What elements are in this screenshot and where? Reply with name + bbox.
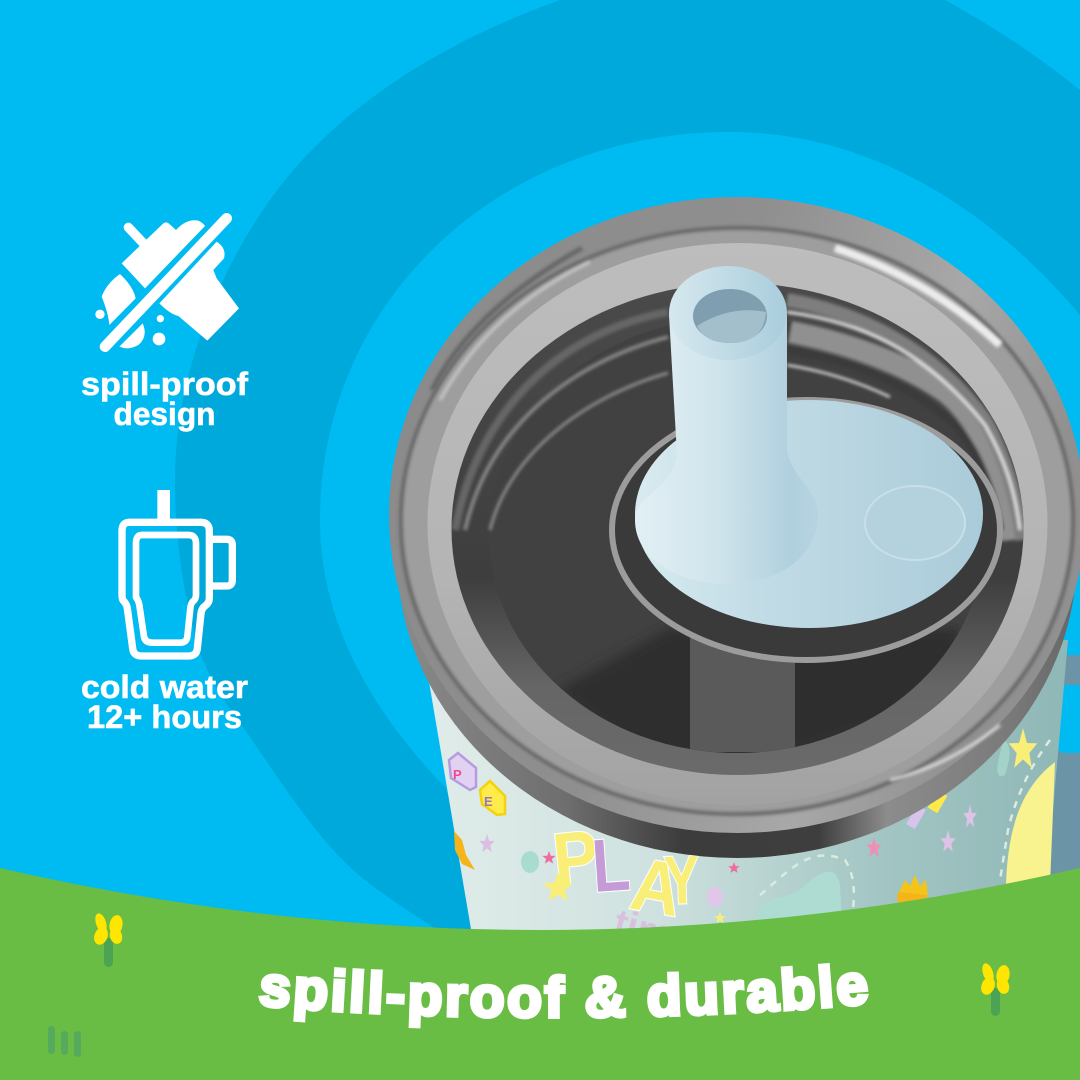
icon: tumbler [122,490,232,656]
print: hearts and orange creatures [454,740,1010,908]
lid: rim groove [401,228,1073,814]
lid: lower dark band [397,252,1077,858]
print: dashed track [760,740,1050,915]
lid: inner clear ring [612,400,1000,660]
feature: spill-proof design [81,218,248,432]
well: tube shadow [557,628,960,760]
print: PLAY lettering: A [625,842,688,933]
label: cold water 12+ hours: cold water [81,669,248,705]
straw hole [693,289,767,343]
lid: inner light band [428,243,1048,805]
cup handle [1035,655,1080,890]
print: letter blocks [449,753,505,815]
print: yellow shape [1006,762,1055,885]
decorative flower left [92,912,124,967]
print: teal blob [758,872,842,925]
print: PLAY lettering [549,815,701,933]
background: inner light swirl [320,132,1080,930]
straw mouth [669,266,787,360]
feature: cold water 12+ hours [81,490,248,735]
print: time lettering: time [610,902,696,962]
background: dark swirl ring [175,0,1080,930]
icon: spill-proof [95,218,239,348]
stopper disc [635,400,983,628]
decorative flower right [979,962,1011,1016]
label: spill-proof design: design [114,396,216,432]
lid: inner opening [452,283,1024,775]
print: stars [479,728,1037,923]
green ground [0,868,1080,1080]
print: letter blocks: P [453,767,462,782]
decorative grass tuft [48,1026,81,1057]
lid: outer rim [389,197,1080,833]
print: PLAY lettering: L [589,823,632,908]
label: spill-proof design: spill-proof [81,366,248,402]
print: PLAY lettering: Y [663,841,701,919]
label: cold water 12+ hours: 12+ hours [87,699,242,735]
lid: rim highlights [432,248,1000,780]
cup lid [389,197,1080,858]
print: letter blocks: E [484,794,493,809]
footer headline: spill-proof & durable [258,963,869,1028]
cup body with print [427,640,1068,962]
well: upper arcs [455,300,1022,540]
stopper vent oval [865,486,965,560]
lid: interior well [455,300,1022,760]
straw tube and base [635,315,818,584]
straw [635,266,818,584]
print: PLAY lettering: P [549,815,603,903]
